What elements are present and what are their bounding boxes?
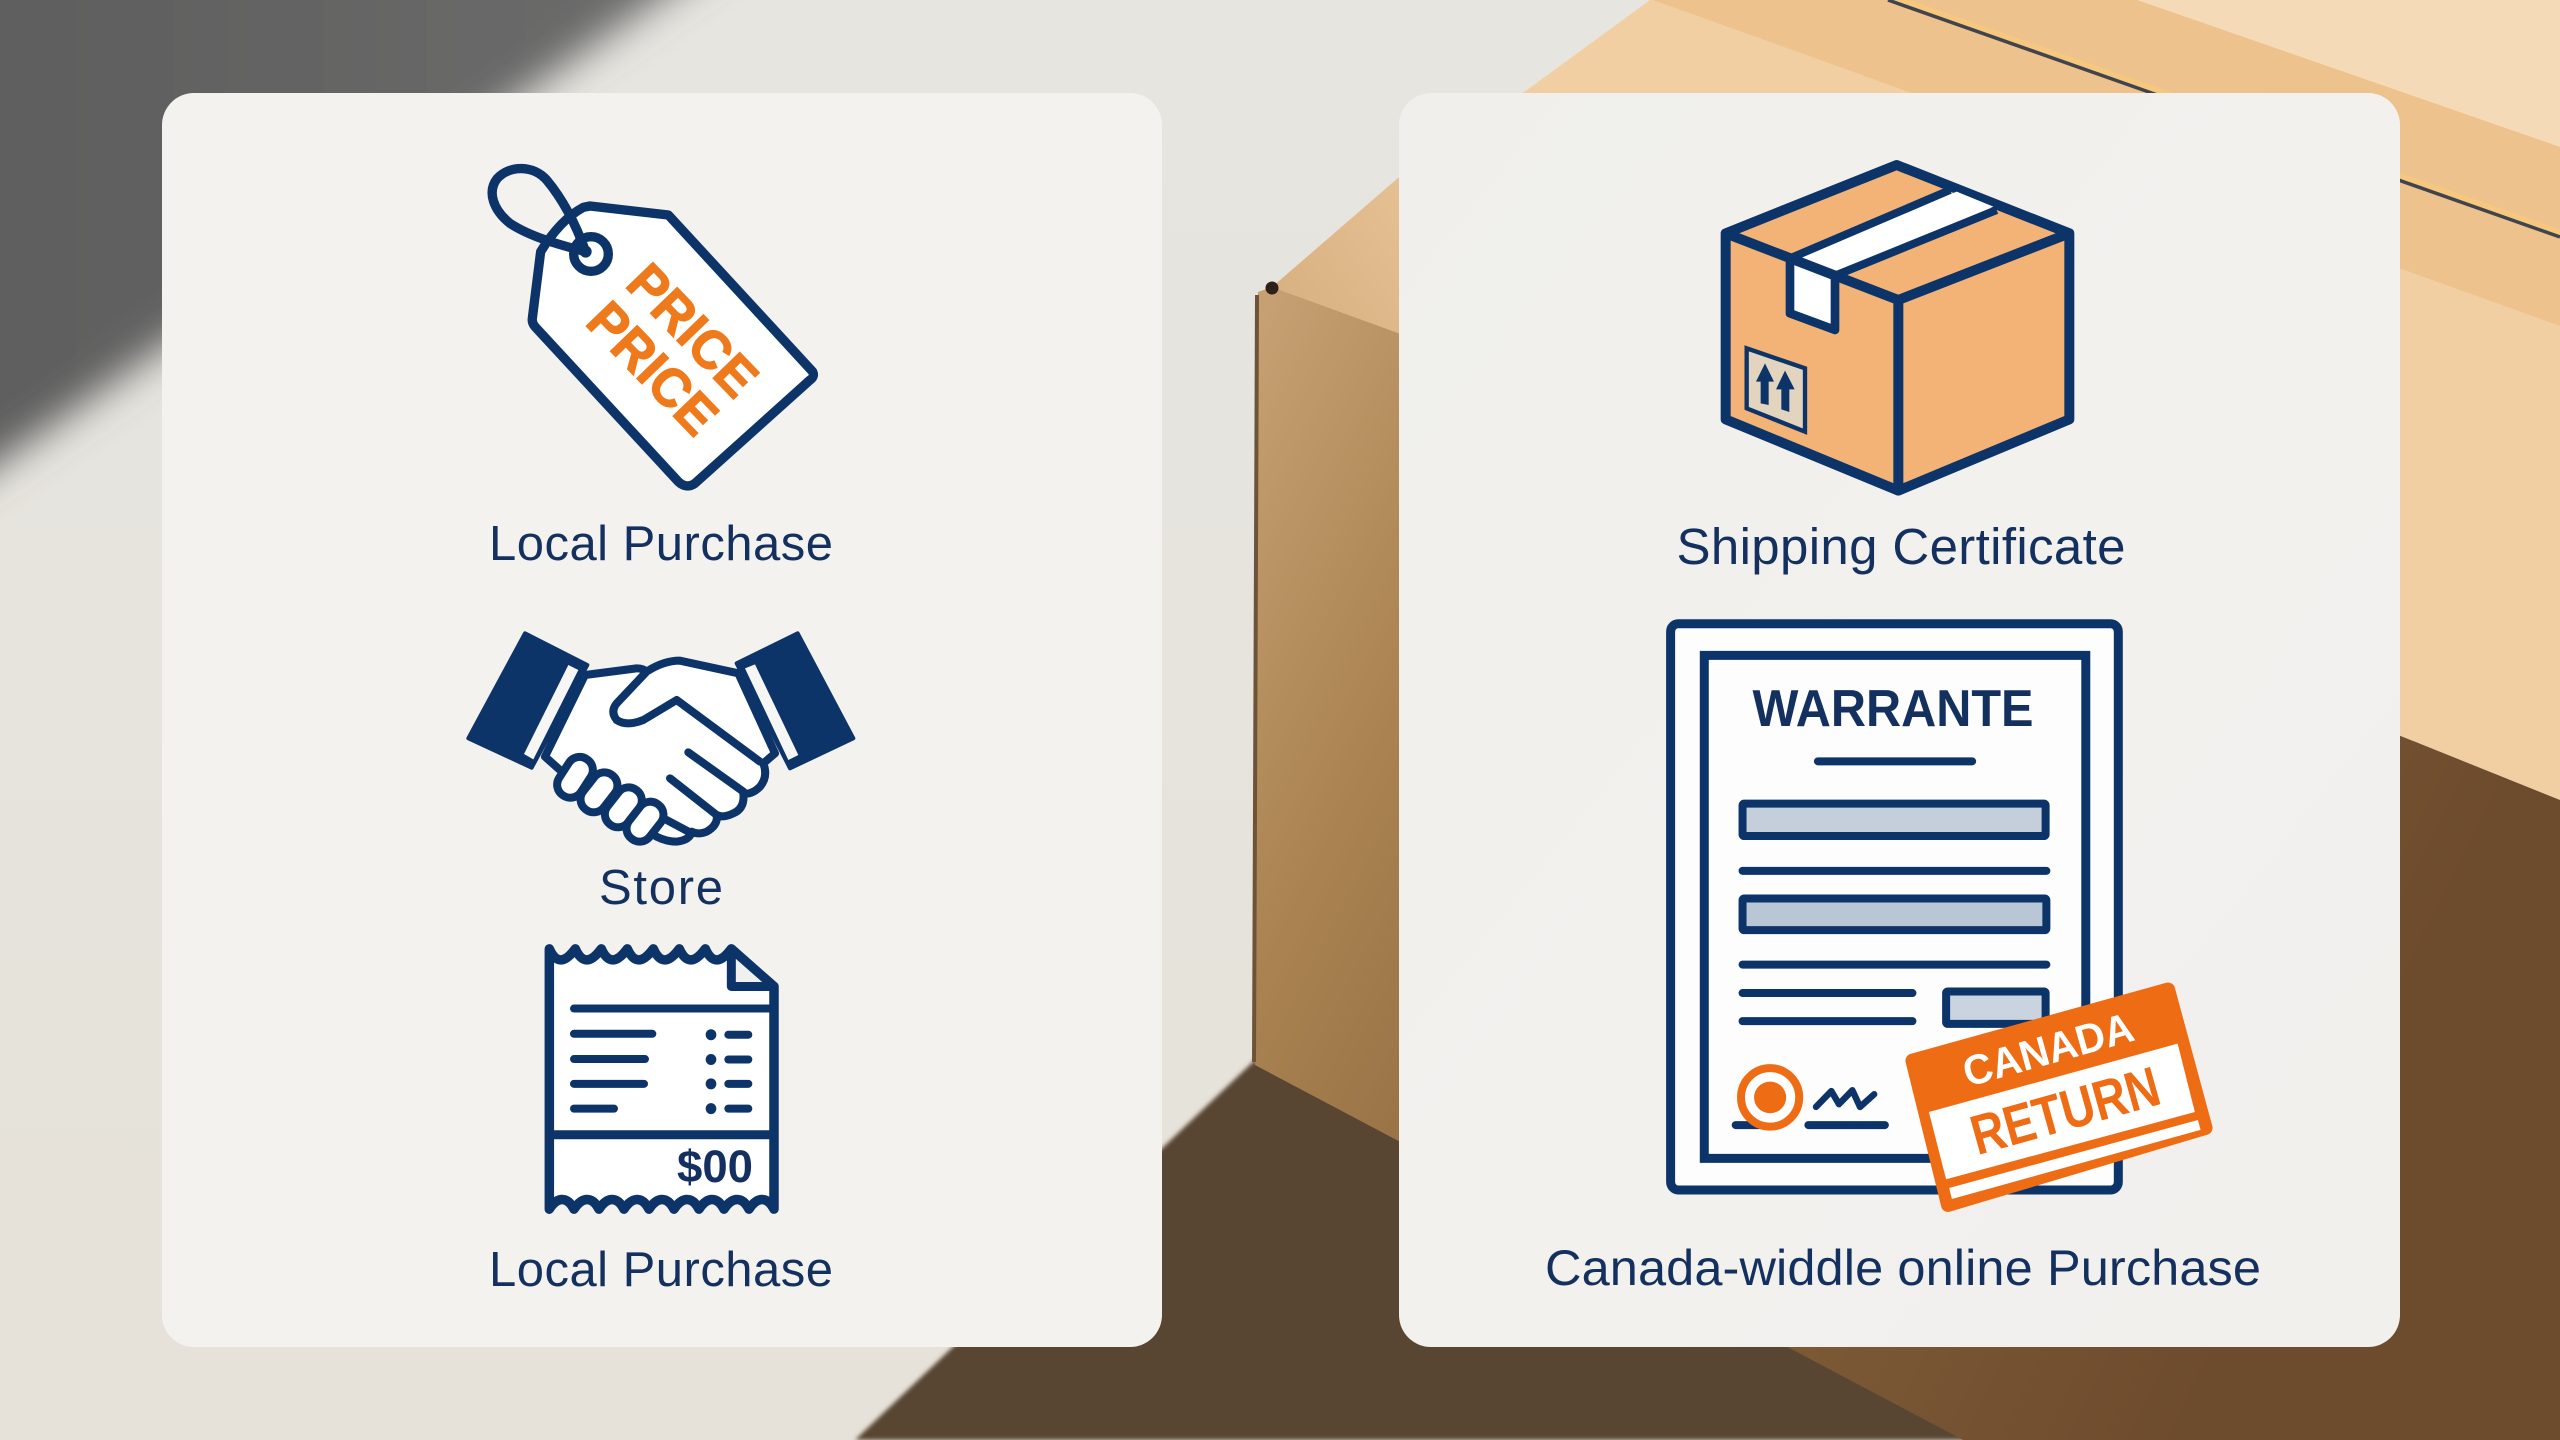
icon: handshake	[468, 633, 853, 847]
icon text: price: PRICE	[615, 252, 769, 409]
stamp text: return: RETURN	[1964, 1054, 2167, 1167]
stamp text: canada: CANADA	[1958, 1003, 2139, 1096]
icon: price tag	[492, 169, 813, 486]
icon: cardboard box	[1726, 165, 2069, 491]
icon: warranty document	[1671, 624, 2206, 1205]
icon text: price: PRICE	[575, 290, 729, 447]
label: local purchase: Local Purchase	[489, 517, 833, 571]
receipt total: $00	[677, 1141, 753, 1192]
panel: shipping and warranty	[1399, 93, 2400, 1347]
icon: receipt	[549, 949, 774, 1209]
panel: local purchase	[162, 93, 1162, 1347]
label: store: Store	[599, 861, 723, 915]
label: shipping certificate: Shipping Certificate	[1676, 518, 2126, 575]
label: canada-wide online purchase: Canada-widdle online Purchase	[1545, 1239, 2261, 1296]
document heading: WARRANTE	[1752, 680, 2034, 738]
label: local purchase, receipt: Local Purchase	[489, 1243, 833, 1297]
icon text: price	[575, 252, 769, 447]
